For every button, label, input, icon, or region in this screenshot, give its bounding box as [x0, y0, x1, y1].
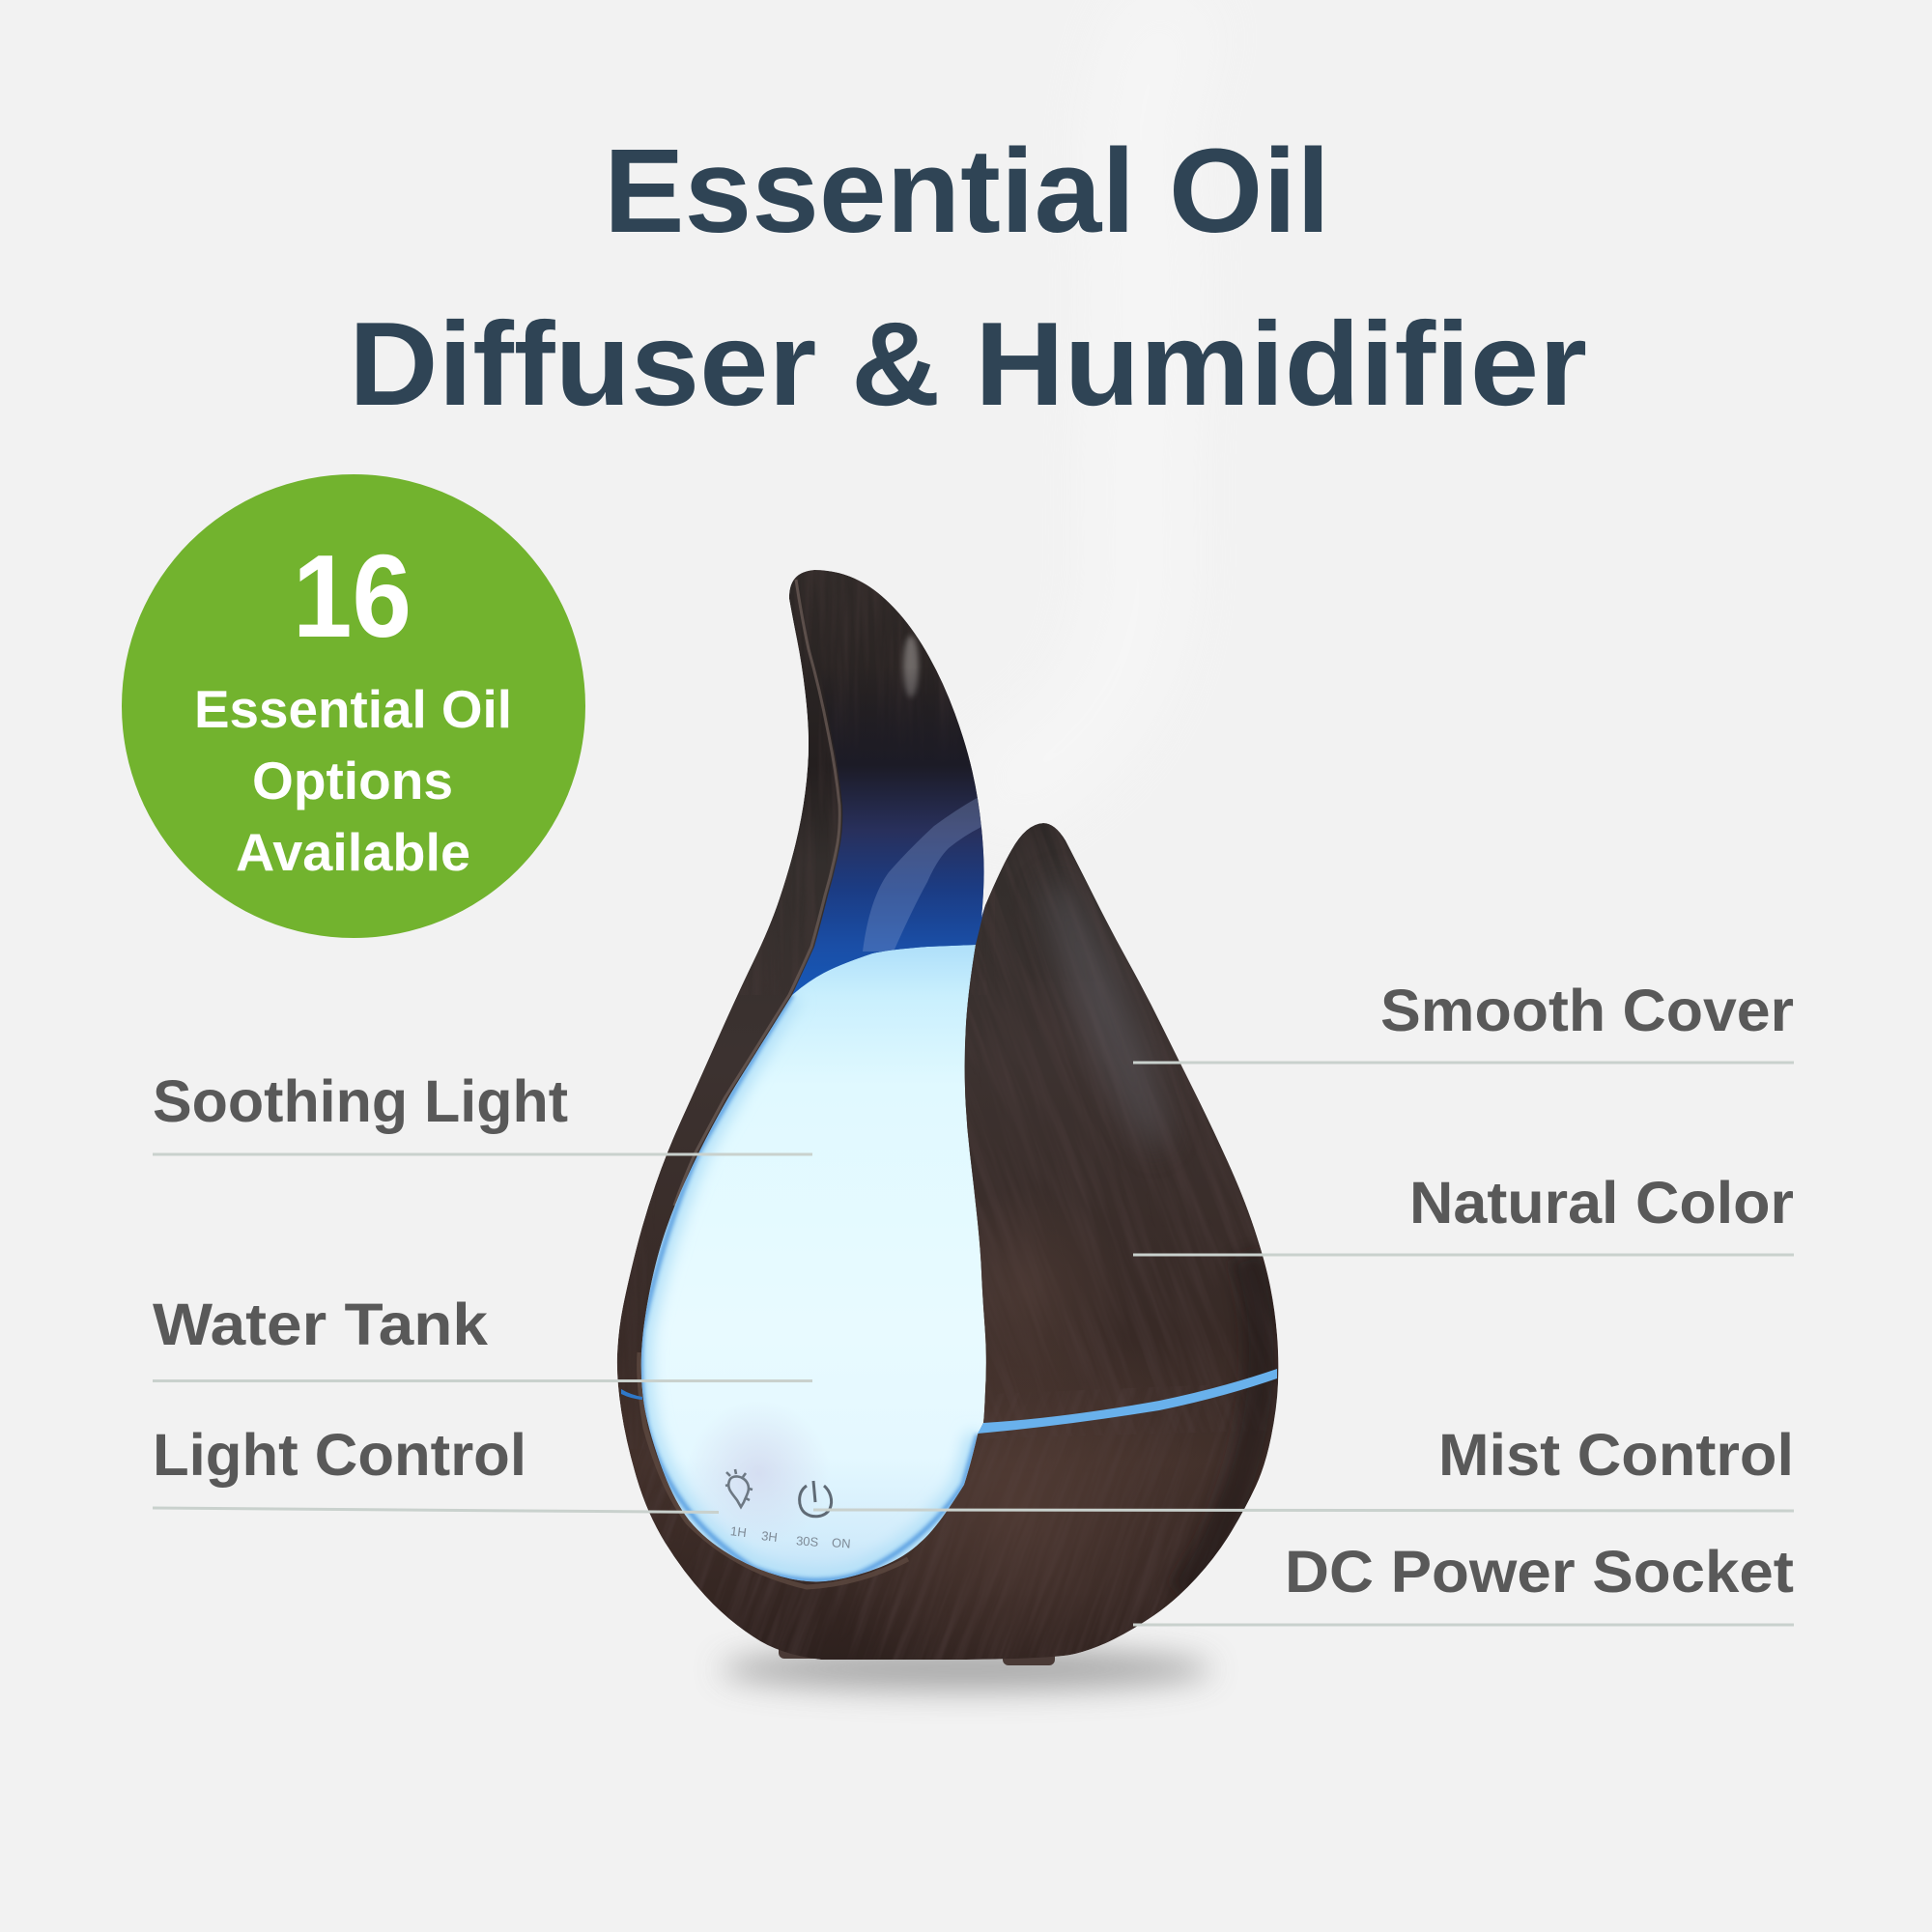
- touch button captions: 3H: [760, 1528, 779, 1545]
- icon: bulb: [725, 1469, 753, 1507]
- left light slit: [621, 1389, 642, 1400]
- label: DC Power Socket: DC Power Socket: [1285, 1539, 1794, 1605]
- badge: 16 essential oil options: Available: [236, 822, 470, 882]
- label: Light Control: [153, 1422, 719, 1513]
- icon: power: [800, 1481, 832, 1517]
- diffuser product: [616, 570, 1279, 1708]
- mist plume: [976, 0, 1179, 802]
- badge: 16 essential oil options: 16: [293, 530, 412, 662]
- shell rim line: [674, 580, 839, 1206]
- title: Diffuser & Humidifier: [349, 298, 1587, 431]
- soft edge glow: [640, 995, 978, 1580]
- glowing water tank window: [640, 945, 986, 1581]
- title: Essential Oil: [604, 126, 1330, 258]
- front sheen band: [1043, 885, 1169, 1144]
- base shadow: [720, 1648, 1212, 1690]
- touch button captions: 30S: [796, 1533, 819, 1549]
- label: Mist Control: Mist Control: [1438, 1422, 1794, 1488]
- reflection on inner wall: [863, 797, 981, 952]
- label: Water Tank: Water Tank: [153, 1292, 488, 1357]
- label: Smooth Cover: Smooth Cover: [1380, 978, 1794, 1043]
- touch button captions: 1H: [729, 1523, 748, 1540]
- horn inner blue wall: [792, 667, 1000, 995]
- title: [349, 126, 1587, 431]
- label: Light Control: Light Control: [153, 1422, 526, 1488]
- label: Soothing Light: Soothing Light: [153, 1068, 568, 1134]
- badge: 16 essential oil options: Options: [252, 751, 453, 810]
- badge: 16 essential oil options: [122, 474, 585, 938]
- wood body: [616, 570, 1279, 1660]
- blue light strip: [978, 1369, 1277, 1434]
- touch button captions: ON: [832, 1535, 851, 1551]
- label: Natural Color: Natural Color: [1409, 1170, 1794, 1236]
- rubber feet: [779, 1644, 1055, 1665]
- window lower rim: [639, 1352, 908, 1587]
- touch button captions: [729, 1523, 851, 1551]
- badge: 16 essential oil options: Essential Oil: [194, 679, 512, 739]
- horn highlight: [903, 636, 919, 697]
